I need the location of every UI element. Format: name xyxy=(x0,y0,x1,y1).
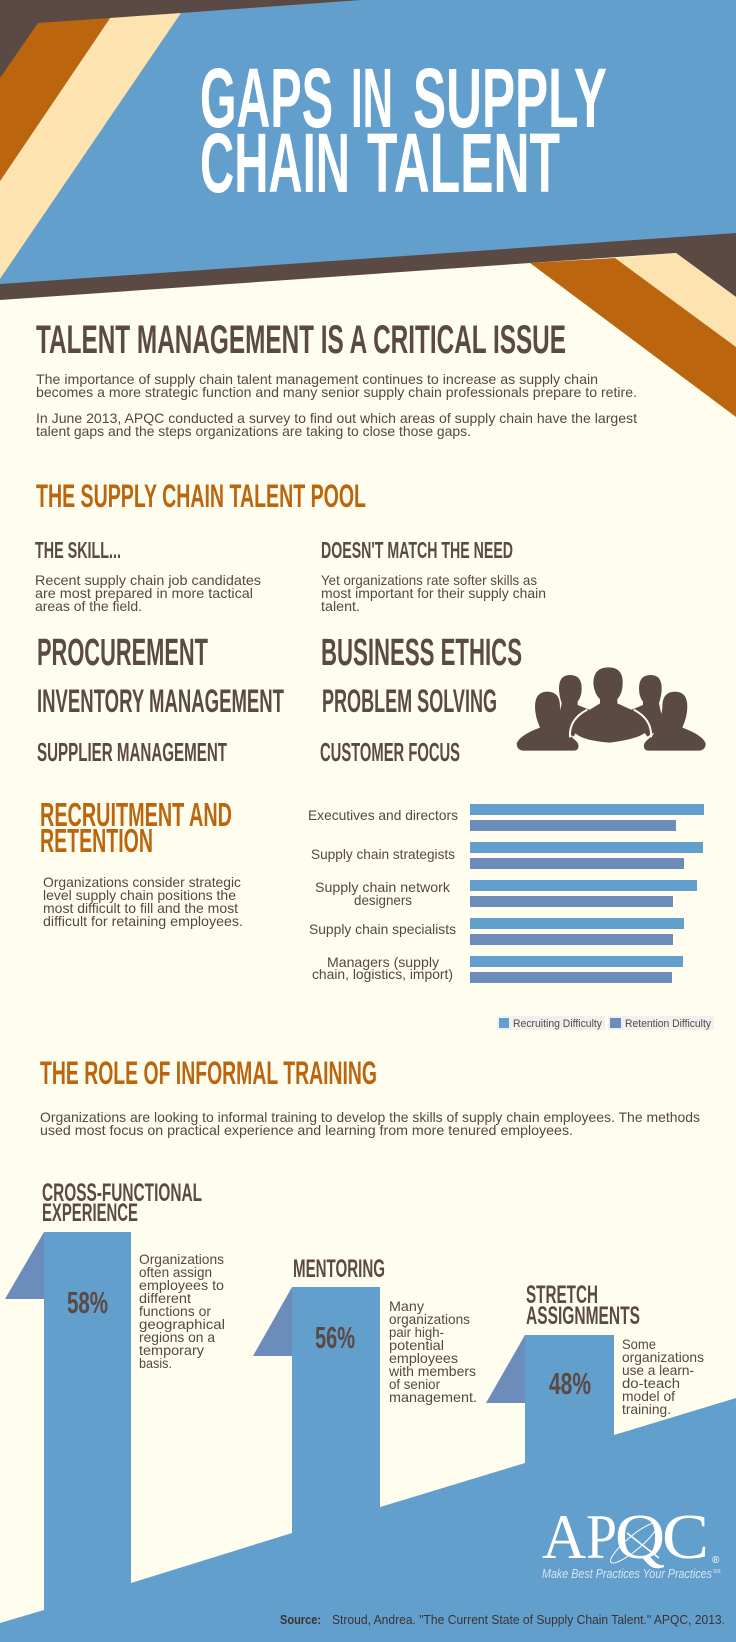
heading: recruitment and retention: RECRUITMENT AND xyxy=(40,796,232,833)
description: Some xyxy=(622,1336,656,1352)
source citation: Source: xyxy=(280,1612,321,1627)
bar labels: Supply chain network xyxy=(315,879,451,895)
bar chart: recruiting and retention difficulty xyxy=(308,804,704,983)
heading: talent pool: THE SUPPLY CHAIN TALENT POOL xyxy=(36,478,366,514)
APQC logo: A xyxy=(542,1501,586,1572)
description: do-teach xyxy=(622,1375,680,1391)
arrow staircase xyxy=(0,1232,736,1642)
title xyxy=(200,51,607,210)
bar labels: chain, logistics, import) xyxy=(312,966,453,982)
description: pair high- xyxy=(389,1324,444,1340)
skill: inventory management: INVENTORY MANAGEMENT xyxy=(37,683,284,719)
description: use a learn- xyxy=(622,1362,694,1378)
text: need description: Yet organizations rate softer skills as xyxy=(321,572,537,588)
description: functions or xyxy=(139,1303,211,1319)
description: management. xyxy=(389,1389,477,1405)
description: organizations xyxy=(622,1349,704,1365)
bar labels xyxy=(308,807,458,982)
intro text: becomes a more strategic function and many senior supply chain professionals prepare to retire. xyxy=(36,384,637,400)
bar labels: designers xyxy=(354,892,412,908)
chart legend xyxy=(497,1016,714,1030)
text: skill description xyxy=(35,572,261,614)
heading: EXPERIENCE xyxy=(42,1199,138,1227)
chart legend: Recruiting Difficulty xyxy=(513,1018,602,1030)
need: business ethics: BUSINESS ETHICS xyxy=(321,632,522,674)
icon: group of people xyxy=(517,667,706,751)
description: employees to xyxy=(139,1277,224,1293)
title: SUPPLY xyxy=(413,51,607,145)
heading: recruitment and retention: RETENTION xyxy=(40,822,153,859)
text: recruitment description: Organizations consider strategic xyxy=(43,874,241,890)
heading: ASSIGNMENTS xyxy=(526,1302,640,1330)
skill: procurement: PROCUREMENT xyxy=(37,632,208,674)
heading: informal training: THE ROLE OF INFORMAL TRAINING xyxy=(40,1055,377,1091)
text: training introduction xyxy=(40,1109,700,1138)
panel: cross-functional experience xyxy=(42,1179,225,1371)
intro text xyxy=(36,371,637,439)
bar labels: Managers (supply xyxy=(327,954,439,970)
text: recruitment description xyxy=(43,874,243,929)
heading: recruitment and retention xyxy=(40,796,232,859)
description: organizations xyxy=(389,1311,470,1327)
retention bars xyxy=(470,820,684,983)
description xyxy=(139,1251,225,1371)
description: regions on a xyxy=(139,1329,215,1345)
text: recruitment description: most difficult to fill and the most xyxy=(43,900,238,916)
description: different xyxy=(139,1290,191,1306)
chart legend: Retention Difficulty xyxy=(625,1018,711,1030)
title: TALENT xyxy=(367,116,560,210)
APQC logo xyxy=(542,1501,720,1581)
panel: mentoring xyxy=(293,1255,477,1405)
percentage: 58% xyxy=(67,1285,108,1320)
heading: STRETCH xyxy=(526,1281,598,1309)
description: often assign xyxy=(139,1264,212,1280)
need: problem solving: PROBLEM SOLVING xyxy=(322,683,497,719)
title: CHAIN xyxy=(200,116,350,210)
description xyxy=(388,1298,477,1405)
text: recruitment description: difficult for retaining employees. xyxy=(43,913,243,929)
panel: the need xyxy=(320,537,546,767)
description: geographical xyxy=(139,1316,225,1332)
APQC logo: ® xyxy=(712,1555,720,1566)
recruiting bars xyxy=(470,804,704,967)
intro text: The importance of supply chain talent management continues to increase as supply chain xyxy=(36,371,598,387)
description: with members xyxy=(388,1363,476,1379)
subheading: the need: DOESN'T MATCH THE NEED xyxy=(321,537,513,563)
APQC logo: C xyxy=(662,1501,709,1572)
text: need description xyxy=(321,572,546,614)
bar labels: Executives and directors xyxy=(308,807,458,823)
description xyxy=(622,1336,704,1417)
APQC logo: Q xyxy=(615,1501,665,1572)
description: employees xyxy=(389,1350,458,1366)
text: need description: most important for their supply chain xyxy=(321,585,546,601)
subheading: the skill: THE SKILL... xyxy=(35,537,121,563)
heading: CROSS-FUNCTIONAL xyxy=(42,1179,202,1207)
bar labels: Supply chain strategists xyxy=(311,846,455,862)
description: Many xyxy=(389,1298,424,1314)
text: skill description: areas of the field. xyxy=(35,598,142,614)
title: IN xyxy=(351,51,393,145)
heading xyxy=(526,1281,640,1330)
header banner xyxy=(0,0,736,417)
text: skill description: are most prepared in more tactical xyxy=(35,585,253,601)
text: need description: talent. xyxy=(321,598,360,614)
panel: stretch assignments xyxy=(526,1281,704,1417)
description: Organizations xyxy=(139,1251,224,1267)
percentage: 56% xyxy=(315,1320,355,1355)
description: temporary xyxy=(139,1342,204,1358)
intro text: In June 2013, APQC conducted a survey to find out which areas of supply chain have the largest xyxy=(36,410,637,426)
text: training introduction: Organizations are looking to informal training to develop the skills of supply chain employees. The methods xyxy=(40,1109,700,1125)
description: of senior xyxy=(389,1376,440,1392)
text: training introduction: used most focus on practical experience and learning from more tenured employees. xyxy=(40,1122,573,1138)
text: skill description: Recent supply chain job candidates xyxy=(35,572,261,588)
title: GAPS xyxy=(200,51,333,145)
text: recruitment description: level supply chain positions the xyxy=(43,887,236,903)
description: potential xyxy=(389,1337,444,1353)
APQC logo: P xyxy=(586,1501,617,1572)
intro text: talent gaps and the steps organizations are taking to close those gaps. xyxy=(36,423,471,439)
need: customer focus: CUSTOMER FOCUS xyxy=(320,737,460,767)
description: basis. xyxy=(139,1355,172,1371)
description: training. xyxy=(622,1401,671,1417)
skill: supplier management: SUPPLIER MANAGEMENT xyxy=(37,737,227,767)
heading xyxy=(42,1179,202,1227)
percentage: 48% xyxy=(549,1366,591,1401)
APQC logo: SM xyxy=(713,1569,720,1575)
panel: the skill xyxy=(35,537,284,767)
heading: MENTORING xyxy=(293,1255,385,1283)
description: model of xyxy=(622,1388,675,1404)
bar labels: Supply chain specialists xyxy=(309,921,456,937)
